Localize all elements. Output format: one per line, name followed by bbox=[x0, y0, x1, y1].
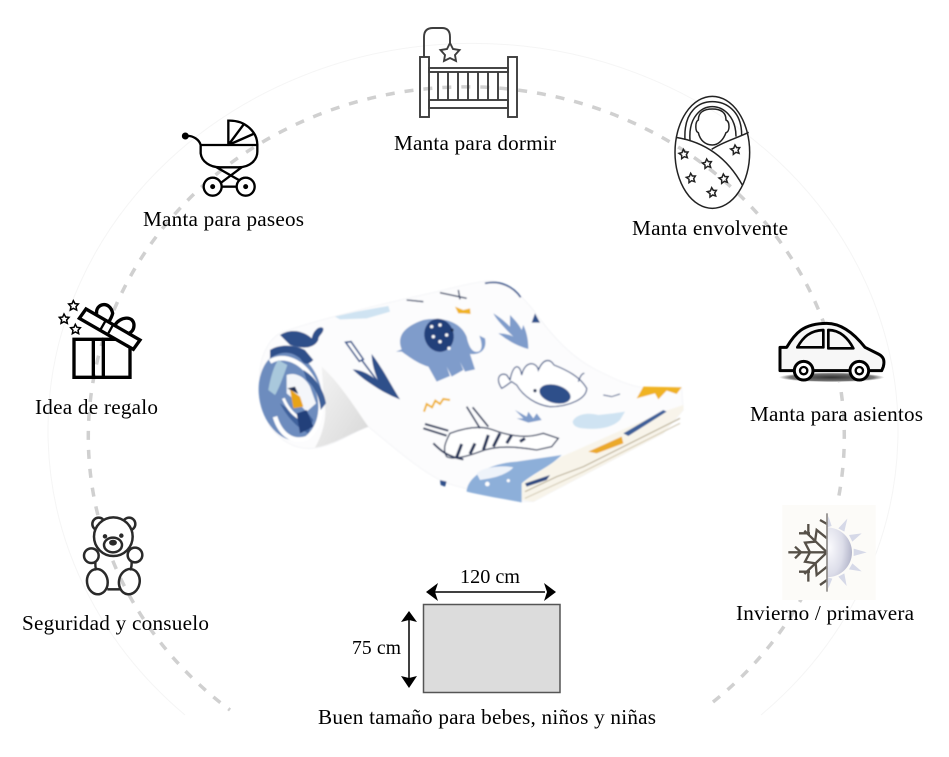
blanket photo bbox=[251, 281, 683, 502]
label: seat blanket: Manta para asientos bbox=[750, 402, 923, 426]
icon: car bbox=[779, 323, 884, 382]
label: gift idea: Idea de regalo bbox=[35, 395, 158, 419]
arrow: width bbox=[426, 583, 556, 601]
icon: crib bbox=[420, 28, 517, 117]
label: safety and comfort: Seguridad y consuelo bbox=[22, 611, 209, 635]
yellow squiggle bbox=[424, 399, 450, 412]
label: swaddle: Manta envolvente bbox=[632, 216, 788, 240]
blanket size rectangle bbox=[424, 604, 560, 692]
faint outer ring bbox=[48, 43, 898, 715]
label: sleep blanket: Manta para dormir bbox=[394, 131, 556, 155]
label: size note: Buen tamaño para bebes, niños y niñas bbox=[318, 705, 656, 729]
label: stroll blanket: Manta para paseos bbox=[143, 207, 304, 231]
dashed ring bbox=[88, 87, 844, 710]
icon: swaddled baby bbox=[675, 96, 750, 208]
label: width: 120 cm bbox=[460, 566, 520, 588]
blue elephant bbox=[396, 319, 485, 382]
icon: teddy bear bbox=[84, 517, 142, 596]
dark plant bbox=[353, 354, 400, 399]
icon: snowflake and sun bbox=[782, 505, 876, 600]
roll end bbox=[251, 345, 331, 447]
arrow: height bbox=[401, 611, 417, 688]
icon: stroller bbox=[183, 121, 257, 196]
icon: gift box bbox=[59, 301, 140, 377]
folded layers bbox=[522, 405, 683, 502]
outlined elephant bbox=[499, 360, 587, 407]
light plant bbox=[493, 313, 528, 349]
size diagram bbox=[352, 566, 560, 692]
label: winter and spring: Invierno / primavera bbox=[736, 601, 915, 625]
zebra bbox=[445, 428, 558, 458]
blue corner bbox=[467, 455, 562, 502]
label: height: 75 cm bbox=[352, 638, 401, 659]
